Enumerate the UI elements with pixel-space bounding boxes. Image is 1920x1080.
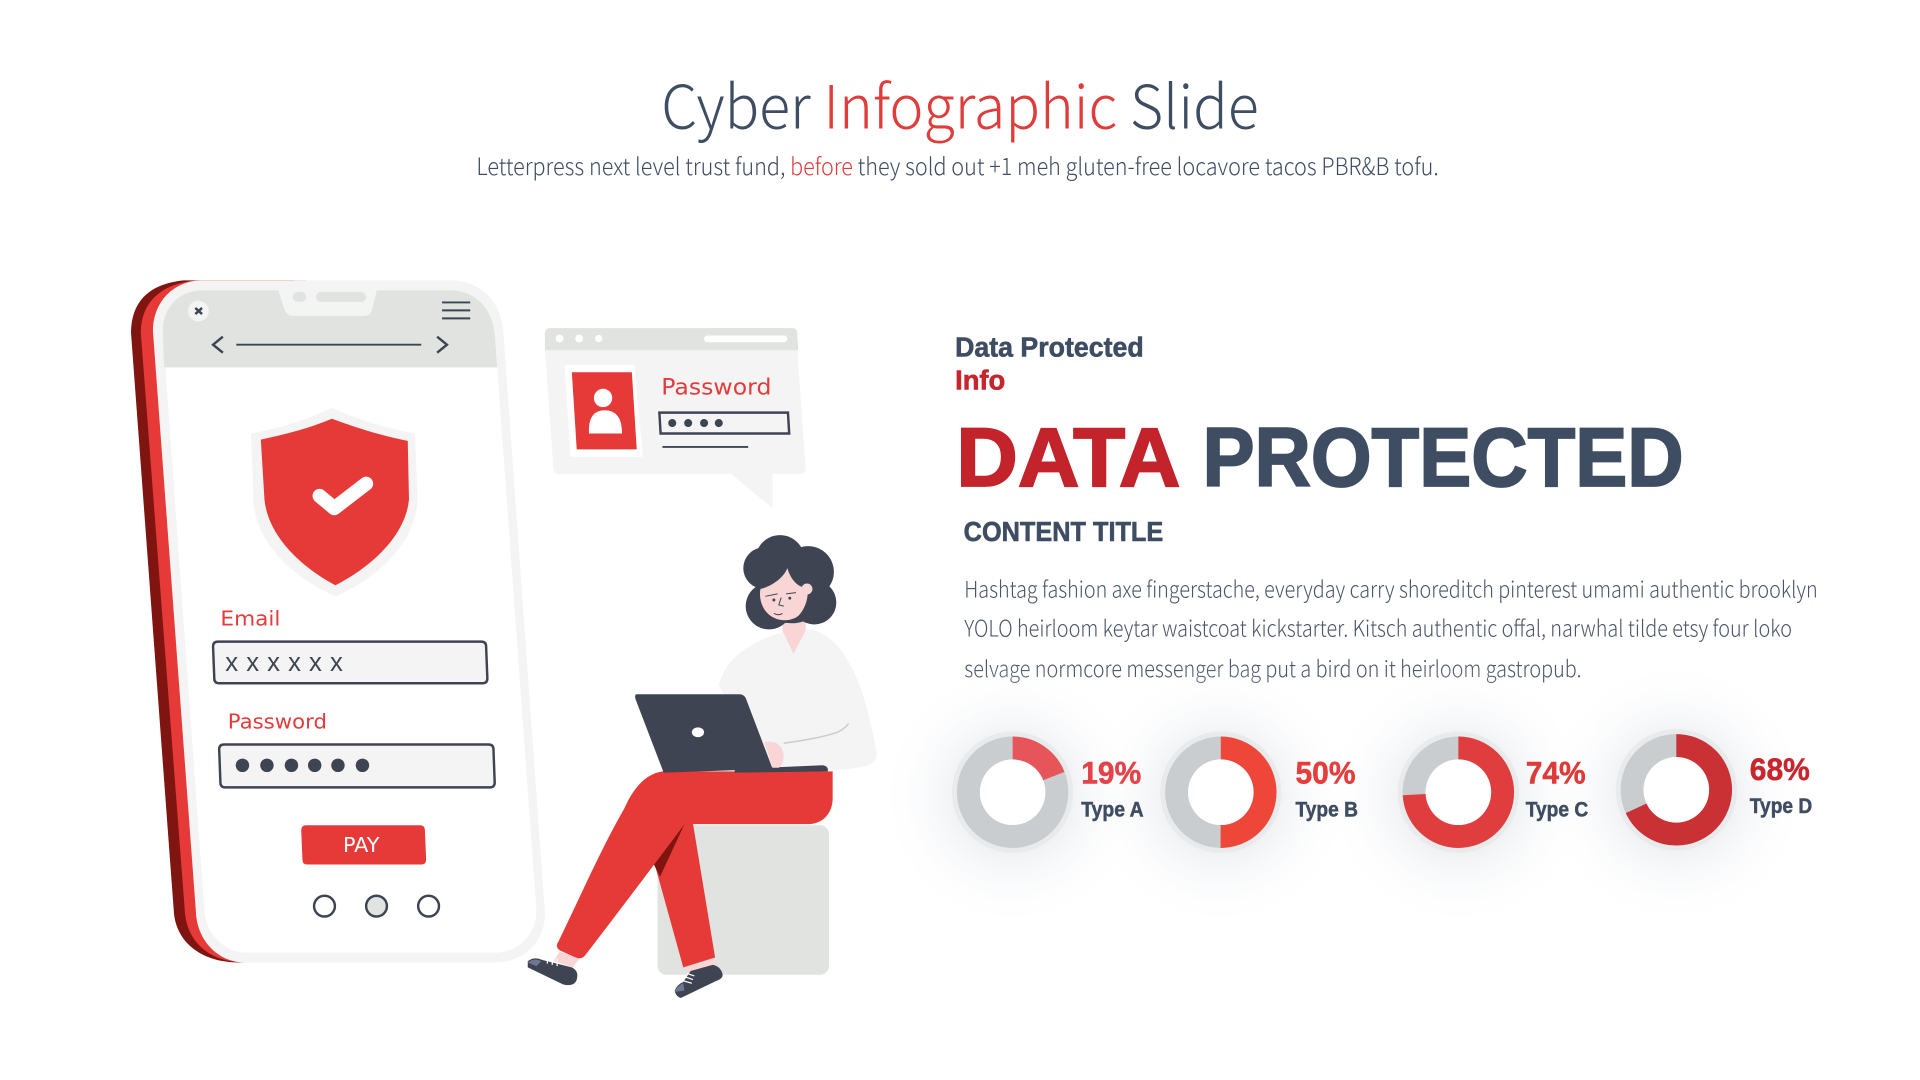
label: type D: 68% xyxy=(1750,751,1810,787)
main headline xyxy=(956,411,1684,504)
heading: data protected info: Data Protected xyxy=(955,331,1144,362)
label: type A xyxy=(1081,755,1144,822)
shield icon xyxy=(251,408,418,596)
rear leg xyxy=(655,823,715,967)
email input xyxy=(213,642,487,683)
face xyxy=(760,568,812,623)
window body xyxy=(545,349,806,508)
main headline: DATA xyxy=(956,411,1180,504)
user photo xyxy=(564,365,643,457)
password label: Password xyxy=(228,710,327,734)
pagination dots xyxy=(314,896,439,917)
label: type B: Type B xyxy=(1296,799,1358,822)
illustration: password speech window xyxy=(545,328,806,508)
donut chart: type B 50% xyxy=(1086,661,1356,931)
label: type D xyxy=(1750,751,1812,818)
main headline: PROTECTED xyxy=(1202,411,1684,504)
label: type B: 50% xyxy=(1296,755,1356,791)
phone notch xyxy=(278,289,377,316)
phone body xyxy=(153,280,545,962)
laptop xyxy=(635,694,828,773)
hamburger menu xyxy=(442,302,470,318)
label: type B xyxy=(1296,755,1358,822)
window password field xyxy=(659,413,789,447)
label: type D: Type D xyxy=(1750,795,1812,818)
phone header bar xyxy=(163,290,497,367)
seat xyxy=(658,825,829,975)
donut chart: type D 68% xyxy=(1542,659,1811,928)
front leg xyxy=(557,771,833,958)
heading: data protected info xyxy=(955,331,1144,395)
phone screen xyxy=(163,290,536,953)
label: type C: Type C xyxy=(1526,799,1588,822)
close button xyxy=(188,301,209,321)
sleeve fold xyxy=(784,724,849,743)
label: type A: Type A xyxy=(1081,799,1144,822)
right shoe xyxy=(675,965,723,998)
heading: data protected info: Info xyxy=(955,364,1005,395)
email label: Email xyxy=(220,607,280,631)
illustration: person with laptop xyxy=(528,535,877,998)
notch pills xyxy=(293,292,366,302)
title: Cyber Infographic Slide xyxy=(661,60,1259,147)
pay button: PAY xyxy=(343,833,380,857)
window password label: Password xyxy=(661,375,771,400)
content title: CONTENT TITLE xyxy=(964,516,1163,547)
phone red edge xyxy=(141,280,306,962)
illustration: phone xyxy=(131,280,545,962)
subtitle: Letterpress next level trust fund, before they sold out +1 meh gluten-free locavore tacos PBR&B tofu. xyxy=(476,147,1439,182)
body text: YOLO heirloom keytar waistcoat kickstarter. Kitsch authentic offal, narwhal tilde etsy four loko xyxy=(964,611,1792,644)
phone back dark edge xyxy=(131,280,294,962)
ankles xyxy=(553,951,718,973)
password input xyxy=(219,744,495,787)
donut chart: type C 74% xyxy=(1324,661,1593,931)
email input: xxxxxx xyxy=(225,649,343,677)
label: type C xyxy=(1526,755,1588,822)
window title bar xyxy=(545,328,798,350)
hand xyxy=(764,742,784,768)
leg shadow xyxy=(654,824,684,877)
label: type C: 74% xyxy=(1526,755,1586,791)
body text xyxy=(964,572,1818,684)
label: type A: 19% xyxy=(1081,755,1141,791)
shirt xyxy=(719,629,877,770)
pay button xyxy=(301,825,426,864)
left shoe xyxy=(528,956,577,985)
body text: Hashtag fashion axe fingerstache, everyday carry shoreditch pinterest umami authentic brooklyn xyxy=(964,572,1818,605)
donut chart: type A 19% xyxy=(878,661,1147,931)
hair xyxy=(743,535,836,629)
navigation bar xyxy=(213,337,447,353)
neck xyxy=(782,618,806,654)
body text: selvage normcore messenger bag put a bird on it heirloom gastropub. xyxy=(964,651,1581,684)
window controls xyxy=(556,335,787,342)
